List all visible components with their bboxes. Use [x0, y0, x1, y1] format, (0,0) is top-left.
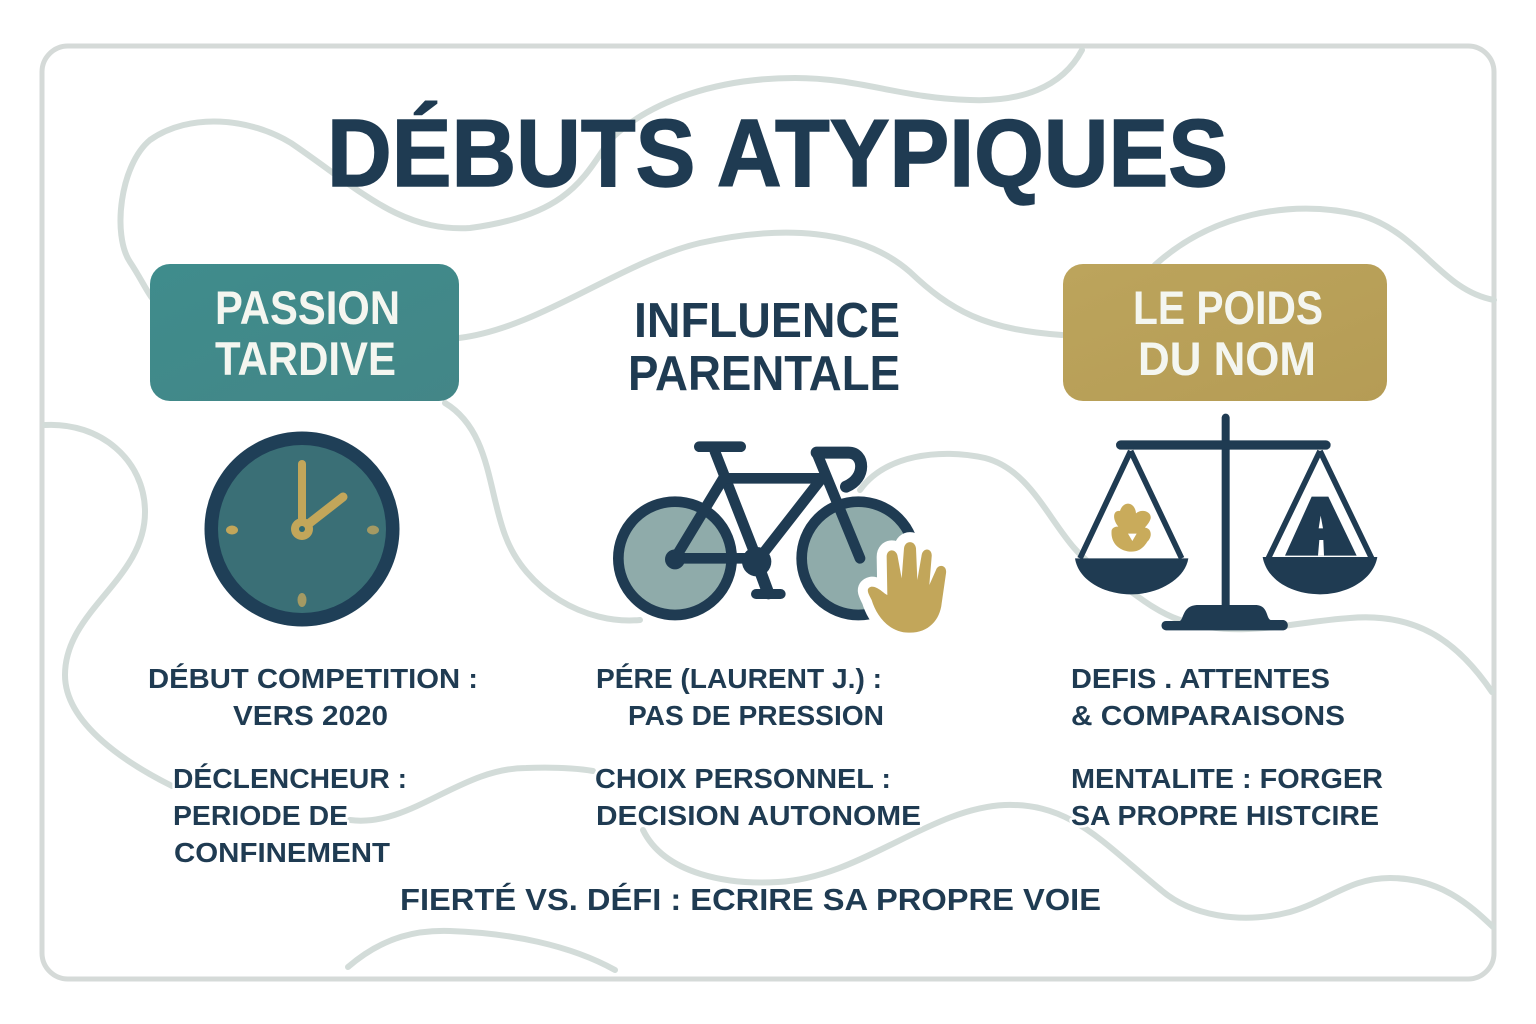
text: père: PÉRE (LAURENT J.) : — [596, 663, 882, 694]
text: déclencheur — [173, 763, 407, 868]
text: déclencheur: PERIODE DE — [173, 800, 348, 831]
badge: passion tardive: TARDIVE — [215, 332, 396, 385]
text: mentalité: MENTALITE : FORGER — [1071, 763, 1383, 794]
text: choix personnel — [595, 763, 921, 831]
text: mentalité — [1071, 763, 1383, 831]
text: père — [596, 663, 884, 731]
text: père: PAS DE PRESSION — [628, 700, 884, 731]
heading: influence parentale: INFLUENCE — [634, 294, 900, 348]
text: début compétition — [148, 663, 478, 731]
badge: passion tardive — [150, 264, 459, 401]
badge: le poids du nom: LE POIDS — [1133, 281, 1323, 334]
title: DÉBUTS ATYPIQUES — [327, 100, 1228, 207]
text: déclencheur: CONFINEMENT — [174, 837, 390, 868]
badge: le poids du nom — [1063, 264, 1387, 401]
conclusion line: FIERTÉ VS. DÉFI : ECRIRE SA PROPRE VOIE — [400, 882, 1101, 917]
panel: passion tardive — [148, 264, 478, 868]
icon: scales — [1075, 418, 1377, 630]
text: déclencheur: DÉCLENCHEUR : — [173, 763, 407, 794]
text: choix personnel: CHOIX PERSONNEL : — [595, 763, 891, 794]
badge: le poids du nom: DU NOM — [1138, 332, 1316, 385]
text: début compétition: DÉBUT COMPETITION : — [148, 663, 478, 694]
text: mentalité: SA PROPRE HISTCIRE — [1071, 800, 1379, 831]
text: choix personnel: DECISION AUTONOME — [596, 800, 921, 831]
badge: passion tardive: PASSION — [215, 281, 400, 334]
icon: clock — [204, 432, 400, 626]
text: début compétition: VERS 2020 — [233, 700, 388, 731]
text: défis: DEFIS . ATTENTES — [1071, 663, 1330, 694]
heading: influence parentale: PARENTALE — [628, 347, 900, 401]
icon: bicycle with hand — [618, 447, 946, 633]
text: défis — [1071, 663, 1345, 731]
text: défis: & COMPARAISONS — [1071, 700, 1345, 731]
panel: influence parentale — [595, 294, 946, 831]
panel: le poids du nom — [1063, 264, 1387, 831]
heading: influence parentale — [628, 294, 900, 401]
